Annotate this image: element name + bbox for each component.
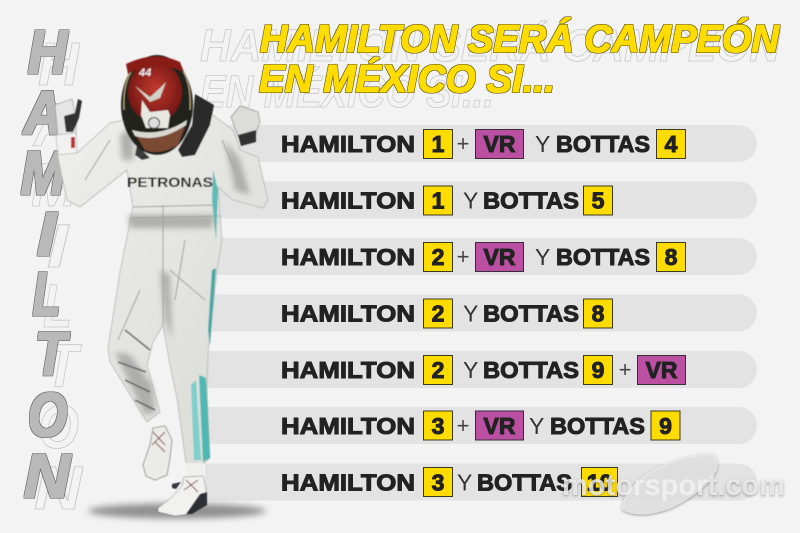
vertical name: HAMILTON: I — [37, 200, 57, 268]
vertical name: HAMILTON: I — [47, 212, 69, 280]
race suit — [57, 115, 268, 465]
sponsor: PETRONAS: PETRONAS — [127, 174, 213, 190]
row 6: 9 — [659, 413, 672, 439]
row 4: BOTTAS — [483, 300, 579, 326]
vertical name: HAMILTON: H — [28, 18, 69, 86]
row 5 — [205, 351, 757, 388]
vertical name: HAMILTON: N — [24, 442, 72, 510]
row 7: Y — [457, 470, 472, 496]
row 3: 2 — [432, 244, 444, 270]
helmet white star panel — [141, 100, 170, 128]
row 3: HAMILTON — [281, 244, 415, 270]
row 2: Y — [463, 188, 478, 214]
row 2: 1 — [432, 188, 445, 214]
row 2 — [205, 182, 757, 218]
row 1: VR — [484, 131, 516, 157]
row 7: 3 — [432, 470, 444, 496]
motorsport.com watermark — [562, 453, 785, 515]
collar — [178, 94, 214, 157]
row 5: 2 — [432, 357, 444, 383]
row 1: HAMILTON — [281, 131, 415, 157]
vertical name: HAMILTON: T — [35, 320, 70, 388]
row 1: BOTTAS — [556, 131, 650, 157]
row 3: Y — [535, 244, 550, 270]
vertical name: HAMILTON: T — [45, 332, 82, 400]
row 7: BOTTAS — [477, 470, 572, 496]
row 5: + — [619, 357, 631, 382]
row 1: + — [457, 131, 469, 156]
row 3: 8 — [665, 244, 678, 270]
row 4: HAMILTON — [281, 300, 415, 326]
vertical name: HAMILTON: M — [31, 151, 78, 219]
left glove — [55, 99, 76, 137]
row 1: 4 — [665, 131, 678, 157]
vertical name: HAMILTON: M — [21, 139, 66, 207]
row 3: BOTTAS — [556, 244, 650, 270]
row 2: BOTTAS — [483, 188, 579, 214]
row 6: HAMILTON — [281, 413, 415, 439]
row 3 — [205, 238, 757, 275]
left shoe — [143, 426, 172, 480]
vertical name: HAMILTON: O — [38, 393, 79, 461]
title — [259, 17, 780, 101]
vertical name: HAMILTON — [21, 18, 84, 522]
right sock — [186, 463, 203, 479]
swoosh logo — [622, 453, 718, 515]
row 1: Y — [535, 131, 550, 157]
title: EN MÉXICO SI... — [259, 57, 555, 101]
vertical name: HAMILTON: A — [22, 79, 62, 147]
row 4: 2 — [432, 300, 444, 326]
right shoe — [158, 476, 207, 516]
row 6: 3 — [432, 413, 444, 439]
row 4 — [205, 294, 757, 332]
row 1 — [205, 125, 757, 162]
row 5: BOTTAS — [483, 357, 579, 383]
row 6: VR — [484, 413, 516, 439]
row 6: Y — [529, 413, 544, 439]
ghost title outline — [200, 20, 781, 117]
row 5: 9 — [592, 357, 604, 383]
title: HAMILTON SERÁ CAMPEÓN — [260, 17, 780, 61]
row 3: + — [457, 244, 469, 269]
row 4: Y — [463, 300, 478, 326]
row 5: HAMILTON — [281, 357, 415, 383]
row 6: + — [457, 413, 469, 438]
ghost title outline: EN MÉXICO SI... — [200, 66, 494, 117]
row 2: 5 — [592, 188, 605, 214]
row 7 — [205, 464, 757, 500]
suit creases — [85, 140, 235, 410]
row 6: BOTTAS — [550, 413, 645, 439]
row 6 — [205, 407, 757, 444]
row 4: 8 — [592, 300, 605, 326]
row 2: HAMILTON — [281, 188, 415, 214]
row 5: Y — [463, 357, 478, 383]
helmet visor — [135, 124, 186, 152]
helmet — [121, 55, 193, 155]
vertical name: HAMILTON: L — [33, 260, 60, 328]
helmet rim highlights — [124, 60, 190, 110]
teal leg stripes — [191, 170, 218, 462]
vertical name: HAMILTON: H — [38, 30, 81, 98]
vertical name: HAMILTON: L — [43, 272, 72, 340]
vertical name: HAMILTON: A — [32, 91, 74, 159]
row 1: 1 — [432, 131, 445, 157]
row 5: VR — [646, 357, 678, 383]
vertical name: HAMILTON: N — [34, 454, 84, 522]
row 3: VR — [484, 244, 516, 270]
vertical name: HAMILTON: O — [28, 381, 67, 449]
watermark text: motorsport.com — [562, 469, 785, 502]
ghost title outline: HAMILTON SERÁ CAMPEÓN — [200, 20, 781, 71]
suit soft shadows — [115, 125, 250, 415]
right glove — [231, 106, 260, 136]
helmet red crown — [128, 62, 182, 122]
driver figure — [55, 55, 268, 516]
ground shadow — [88, 504, 266, 518]
row 7: 10 — [587, 470, 612, 496]
helmet number 44: 44 — [138, 67, 151, 79]
row 7: HAMILTON — [281, 470, 415, 496]
